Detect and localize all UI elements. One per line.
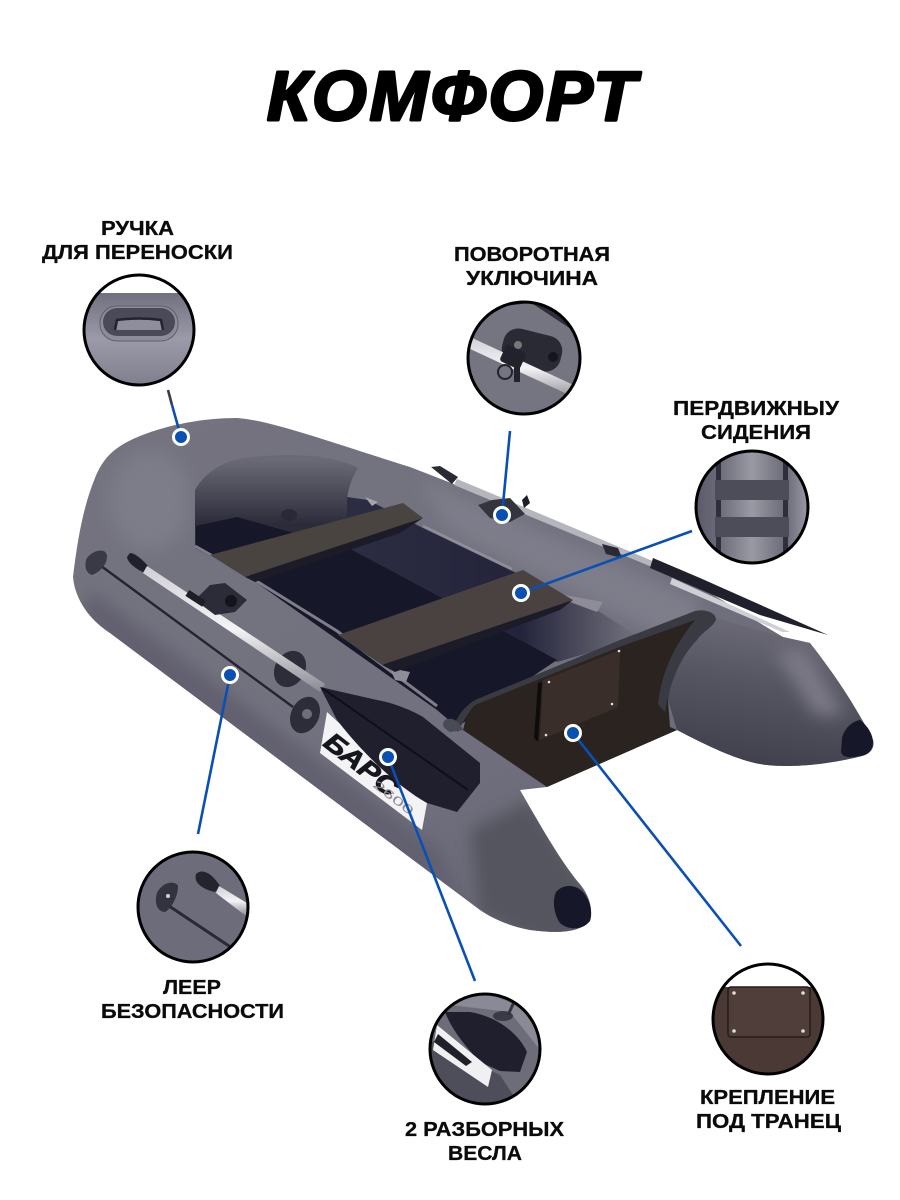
label (101, 977, 284, 1023)
sticker: 2600 (370, 777, 417, 818)
label: УКЛЮЧИНА (466, 268, 598, 290)
safety rope (97, 563, 293, 707)
label: ПОВОРОТНАЯ (454, 244, 610, 266)
label: 2 РАЗБОРНЫХ (405, 1119, 565, 1141)
leader line (502, 431, 510, 515)
label (673, 398, 840, 444)
marker (174, 430, 188, 444)
callout: carry handle (42, 218, 233, 444)
label: ДЛЯ ПЕРЕНОСКИ (42, 242, 233, 264)
front seat (338, 570, 603, 682)
marker (514, 586, 528, 600)
leader line (521, 531, 692, 593)
detail photo: safety line (138, 852, 252, 964)
leader line (573, 733, 741, 946)
marker (494, 508, 510, 522)
callout: safety line (101, 668, 284, 1023)
callout: transom mount (566, 726, 841, 1133)
marker (566, 726, 580, 740)
label: БЕЗОПАСНОСТИ (101, 1001, 284, 1023)
label (696, 1087, 841, 1133)
near oarlock (185, 583, 247, 615)
marker (380, 750, 396, 764)
rear seat (210, 497, 423, 582)
label: ПЕРДВИЖНЫУ (673, 398, 840, 420)
detail photo: seats (696, 451, 808, 563)
leader line (168, 390, 181, 437)
detail photo: handle (84, 275, 196, 385)
label: ЛЕЕР (163, 977, 221, 999)
sticker (318, 712, 427, 830)
label: ПОД ТРАНЕЦ (696, 1111, 841, 1133)
leader line (388, 757, 475, 981)
far oarlock (478, 495, 530, 522)
detail photo: oar blade (430, 994, 542, 1106)
label: РУЧКА (101, 218, 174, 240)
hull grips (85, 550, 326, 738)
near oar (127, 553, 480, 812)
label (454, 244, 610, 290)
callout: sliding seats (514, 398, 840, 600)
label (405, 1119, 565, 1165)
sticker: БАРС (318, 726, 406, 804)
callout: oars (380, 750, 565, 1165)
hull (73, 418, 873, 950)
boat illustration (73, 418, 873, 950)
right tube end (668, 617, 873, 766)
left tube end (554, 886, 591, 928)
transom (443, 610, 716, 787)
label: СИДЕНИЯ (701, 422, 811, 444)
detail photo: mounting plate (713, 964, 825, 1074)
far oar (431, 466, 828, 635)
leader line (198, 675, 230, 834)
label (42, 218, 233, 264)
label: КРЕПЛЕНИЕ (700, 1087, 835, 1109)
marker (222, 668, 238, 682)
label: ВЕСЛА (448, 1143, 522, 1165)
callout: swivel oarlock (454, 244, 610, 522)
title: КОМФОРТ (267, 57, 641, 135)
cockpit interior (195, 455, 640, 727)
detail photo: oarlock (468, 302, 580, 414)
